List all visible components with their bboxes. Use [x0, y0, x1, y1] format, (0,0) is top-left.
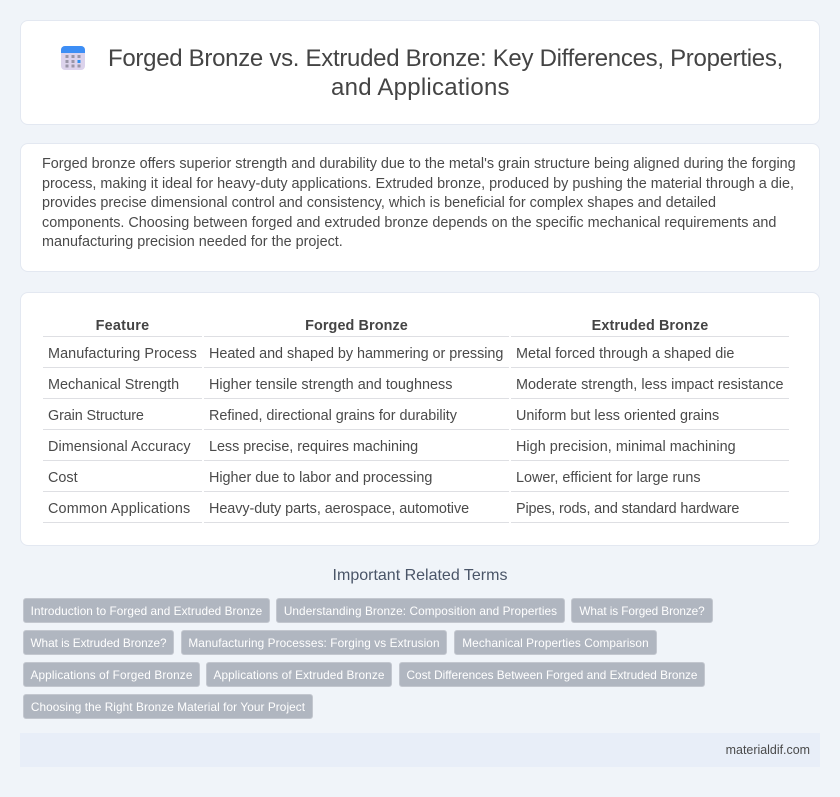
tag group: related terms: What is Forged Bronze? — [579, 604, 705, 618]
table row: dimensional accuracy: High precision, minimal machining — [516, 439, 736, 455]
title: Forged Bronze vs. Extruded Bronze: Key Differences, Properties, — [108, 45, 783, 72]
table header: Forged Bronze — [305, 318, 408, 334]
text block: introduction — [42, 156, 796, 250]
table row: cost — [48, 470, 701, 486]
tag group: related terms: Understanding Bronze: Composition and Properties — [284, 604, 557, 618]
table row: manufacturing process: Metal forced through a shaped die — [516, 346, 734, 362]
table row: manufacturing process: Heated and shaped by hammering or pressing — [209, 346, 503, 362]
tag group: related terms: Mechanical Properties Comparison — [462, 636, 649, 650]
tag group: related terms: Applications of Forged Bronze — [30, 668, 193, 682]
table row: manufacturing process: Manufacturing Process — [48, 346, 197, 362]
table row: grain structure: Uniform but less oriented grains — [516, 408, 719, 424]
footer text: materialdif.com — [726, 743, 810, 757]
panel: introduction — [20, 143, 820, 272]
footer bar — [20, 733, 820, 767]
title: and Applications — [331, 74, 510, 101]
panel: comparison table — [20, 292, 820, 546]
text block: introduction: provides precise dimensional control and consistency, which is beneficial for complex shapes and detailed — [42, 195, 716, 211]
heading: important related terms: Important Related Terms — [333, 567, 507, 584]
table row: dimensional accuracy: Less precise, requires machining — [209, 439, 418, 455]
table row: grain structure: Grain Structure — [48, 408, 144, 424]
table row: mechanical strength: Mechanical Strength — [48, 377, 179, 393]
table row: common applications: Pipes, rods, and standard hardware — [516, 501, 739, 517]
table row: dimensional accuracy — [48, 439, 736, 455]
table row: dimensional accuracy: Dimensional Accuracy — [48, 439, 191, 455]
text block: introduction: components. Choosing between forged and extruded bronze depends on the specific mechanical requirements and — [42, 214, 776, 230]
table row: mechanical strength — [48, 377, 784, 393]
table header: Extruded Bronze — [592, 318, 708, 334]
text block: introduction: process, making it ideal for heavy-duty applications. Extruded bronze, produced by pushing the material through a die, — [42, 176, 794, 192]
table row: common applications: Common Applications — [48, 501, 190, 517]
tag group: related terms — [23, 598, 713, 719]
icon: calendar grid — [61, 46, 85, 70]
tag group: related terms: Cost Differences Between Forged and Extruded Bronze — [407, 668, 697, 682]
tag group: related terms: What is Extruded Bronze? — [30, 636, 167, 650]
table row: manufacturing process — [48, 346, 734, 362]
tag group: related terms: Applications of Extruded Bronze — [214, 668, 384, 682]
table row: cost: Cost — [48, 470, 78, 486]
title — [108, 45, 783, 101]
table row: mechanical strength: Moderate strength, less impact resistance — [516, 377, 784, 393]
table header: Feature — [96, 318, 149, 334]
text block: introduction: Forged bronze offers superior strength and durability due to the metal's grain structure being aligned during the forging — [42, 156, 796, 172]
text block: introduction: manufacturing precision needed for the project. — [42, 234, 343, 250]
tag group: related terms: Choosing the Right Bronze Material for Your Project — [31, 700, 305, 714]
table row: cost: Lower, efficient for large runs — [516, 470, 701, 486]
table row: grain structure: Refined, directional grains for durability — [209, 408, 457, 424]
table row: cost: Higher due to labor and processing — [209, 470, 432, 486]
table row: common applications — [48, 501, 739, 517]
table row: common applications: Heavy-duty parts, aerospace, automotive — [209, 501, 469, 517]
table header — [96, 318, 708, 334]
tag group: related terms: Introduction to Forged and Extruded Bronze — [31, 604, 262, 618]
table row: mechanical strength: Higher tensile strength and toughness — [209, 377, 453, 393]
panel: header — [20, 20, 820, 125]
table row: grain structure — [48, 408, 719, 424]
tag group: related terms: Manufacturing Processes: Forging vs Extrusion — [188, 636, 440, 650]
